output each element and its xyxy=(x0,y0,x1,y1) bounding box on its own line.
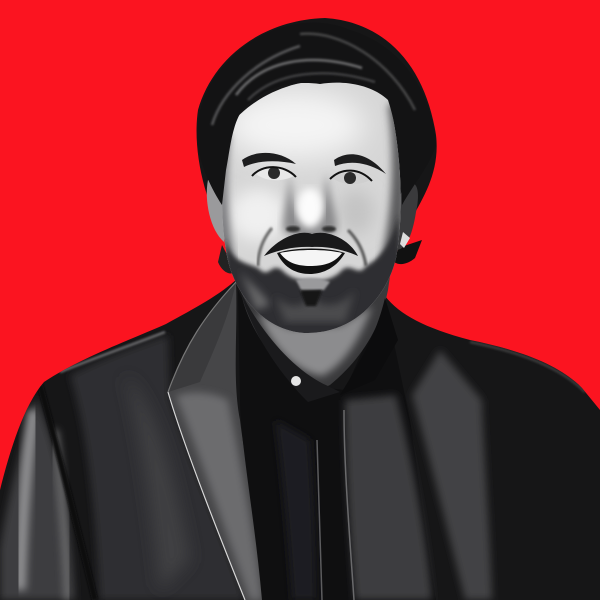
neck xyxy=(240,240,398,402)
hair back and sides xyxy=(197,18,437,274)
eye right xyxy=(330,171,372,184)
cheek highlight xyxy=(230,189,286,241)
right face shadow xyxy=(376,100,400,277)
right jacket edge xyxy=(470,342,585,392)
eye left xyxy=(252,167,296,180)
eyebrow right xyxy=(334,154,386,174)
jacket left body xyxy=(0,332,245,600)
right lapel xyxy=(412,350,492,600)
forehead highlight xyxy=(225,91,365,159)
face xyxy=(218,80,405,340)
nose shading xyxy=(283,170,337,238)
ears xyxy=(207,180,418,250)
jacket xyxy=(0,278,600,600)
smile lines xyxy=(258,228,272,266)
shirt xyxy=(242,394,434,600)
mustache xyxy=(264,233,358,256)
smile xyxy=(277,248,345,274)
left face edge shadow xyxy=(222,134,238,261)
left lapel xyxy=(168,282,268,600)
hair front xyxy=(197,23,436,205)
beard xyxy=(226,215,402,340)
eyebrow left xyxy=(242,153,296,167)
